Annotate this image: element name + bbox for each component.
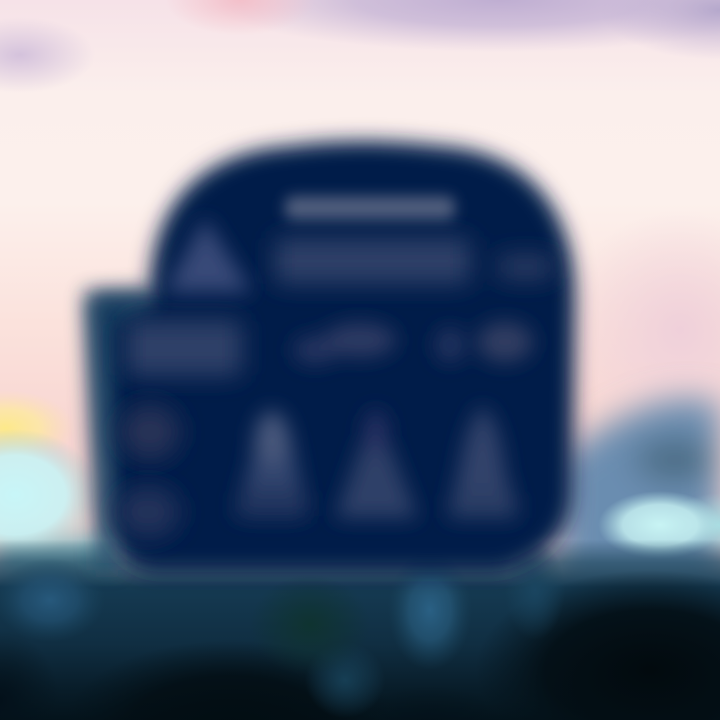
icon: left column upper [120,404,180,460]
section label: middle [293,323,396,364]
background: dark foreground city and trees [0,530,720,720]
section text: left column [126,320,242,376]
icon: top-left triangle [164,218,252,292]
background: bright water at right [598,491,720,559]
subheading text block [275,238,553,284]
left panel teal edge [84,288,150,570]
panel: dark navy rounded board [84,141,575,572]
column: first figure [235,408,308,518]
yellow sun glow [0,390,75,466]
heading bar [285,196,455,220]
column: third figure [448,406,518,518]
icon: left column lower [116,486,180,538]
right horizon tint [560,210,720,450]
section label: right [436,322,533,362]
background: hills on the right [560,399,720,580]
background: bright water at left [0,429,115,580]
clouds at top [0,0,720,93]
column: second figure [335,408,418,518]
